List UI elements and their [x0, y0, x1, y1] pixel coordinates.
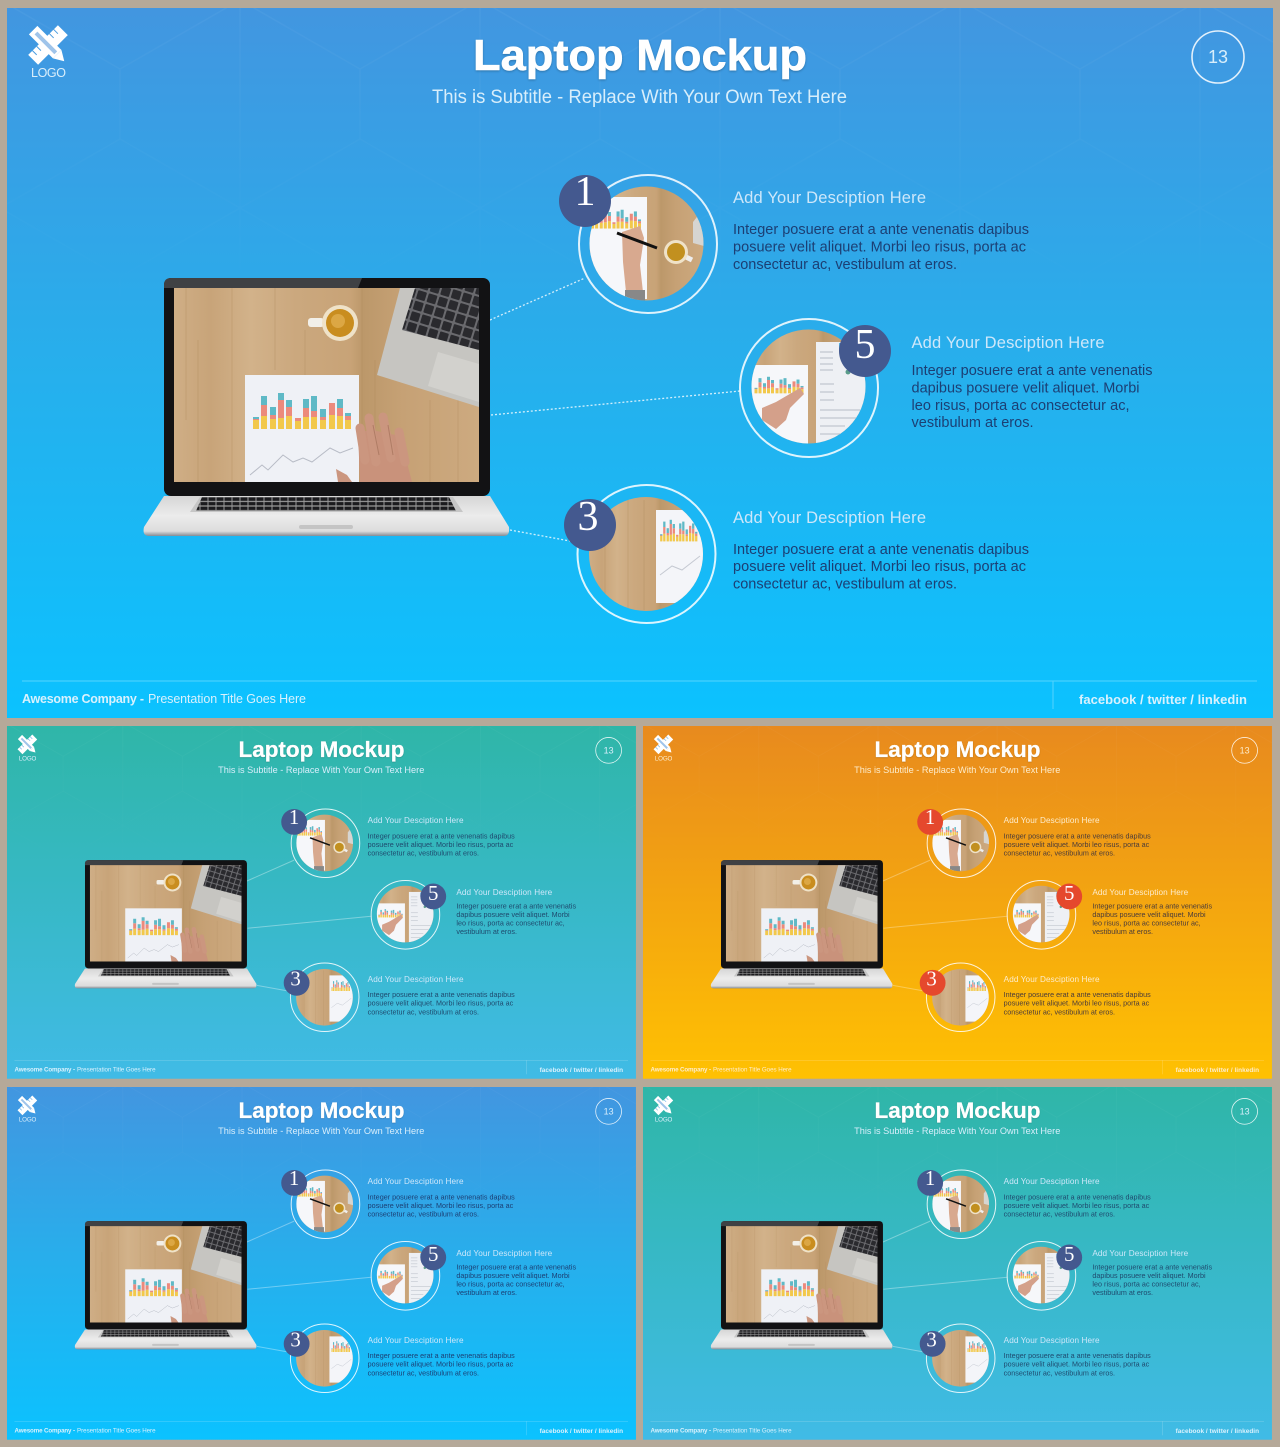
title: Laptop Mockup: [875, 737, 1040, 762]
slide background: [7, 8, 1273, 718]
description 1: consectetur ac, vestibulum at eros.: [368, 849, 479, 858]
background hexagon pattern: [7, 8, 1273, 348]
number badge 1: [559, 169, 611, 227]
logo label: LOGO: [31, 66, 66, 80]
slide background: [7, 1087, 636, 1440]
description 5: vestibulum at eros.: [912, 415, 1034, 431]
photo circle 5: [1007, 1242, 1076, 1310]
description 5: dapibus posuere velit aliquet. Morbi: [456, 910, 570, 919]
description 5: Integer posuere erat a ante venenatis: [456, 901, 576, 910]
footer company text: Awesome Company -: [650, 1066, 711, 1073]
number badge 3: 3: [926, 966, 937, 990]
icon: logo: [654, 735, 674, 755]
description 1: consectetur ac, vestibulum at eros.: [1004, 849, 1115, 858]
description 1: [733, 189, 1029, 273]
number badge 3: [284, 966, 310, 996]
footer company text: Presentation Title Goes Here: [713, 1066, 792, 1073]
description 5: leo risus, porta ac consectetur ac,: [912, 398, 1130, 414]
footer company text: [14, 1066, 156, 1073]
number badge 1: [917, 805, 943, 835]
description 5: leo risus, porta ac consectetur ac,: [456, 919, 565, 928]
description 3: posuere velit aliquet. Morbi leo risus, porta ac: [368, 1360, 514, 1369]
photo circle 3: [926, 963, 995, 1032]
logo label: LOGO: [655, 1116, 672, 1123]
description 1: consectetur ac, vestibulum at eros.: [368, 1210, 479, 1219]
description 1: Add Your Desciption Here: [1004, 816, 1100, 825]
laptop mockup: [75, 860, 256, 988]
footer company text: [650, 1427, 792, 1434]
description 3: consectetur ac, vestibulum at eros.: [368, 1007, 479, 1016]
description 5: Add Your Desciption Here: [456, 1249, 553, 1258]
icon: logo: [18, 735, 38, 755]
footer rules: [14, 1060, 628, 1074]
icon: logo: [18, 1096, 38, 1116]
number badge 5: 5: [1064, 881, 1074, 905]
description 5: Integer posuere erat a ante venenatis: [1092, 901, 1212, 910]
description 5: vestibulum at eros.: [456, 1288, 517, 1297]
icon: logo: [28, 25, 69, 66]
logo label: LOGO: [19, 1116, 36, 1123]
photo circle 3: [926, 1324, 995, 1393]
description 3: consectetur ac, vestibulum at eros.: [1004, 1368, 1115, 1377]
logo label: LOGO: [655, 755, 672, 762]
photo circle 3: [290, 963, 359, 1032]
description 1: posuere velit aliquet. Morbi leo risus, porta ac: [733, 240, 1026, 256]
number badge 5: [839, 322, 891, 377]
footer social links: facebook / twitter / linkedin: [540, 1428, 623, 1435]
footer company text: Awesome Company -: [14, 1066, 75, 1073]
number badge 5: 5: [854, 322, 876, 368]
connector lines: [247, 860, 371, 991]
description 5: Add Your Desciption Here: [1092, 888, 1189, 897]
number badge 5: [420, 1242, 446, 1270]
description 1: Integer posuere erat a ante venenatis dapibus: [368, 831, 515, 840]
description 3: Integer posuere erat a ante venenatis dapibus: [733, 542, 1029, 558]
description 1: posuere velit aliquet. Morbi leo risus, porta ac: [1004, 840, 1150, 849]
description 3: Add Your Desciption Here: [368, 975, 464, 984]
description 3: Integer posuere erat a ante venenatis dapibus: [368, 990, 515, 999]
description 1: [1004, 816, 1151, 858]
footer company text: Awesome Company -: [14, 1427, 75, 1434]
number badge 1: [917, 1166, 943, 1196]
description 1: Integer posuere erat a ante venenatis dapibus: [1004, 831, 1151, 840]
number badge 3: [284, 1327, 310, 1357]
small slide: blue: [7, 1087, 636, 1440]
number badge 1: [281, 1166, 307, 1196]
number badge 3: [920, 966, 946, 996]
title: Laptop Mockup: [239, 1098, 404, 1123]
description 3: Add Your Desciption Here: [1004, 975, 1100, 984]
page number badge: 13: [1208, 47, 1228, 67]
page number badge: [1192, 31, 1244, 83]
laptop mockup: [711, 1221, 892, 1349]
description 5: Integer posuere erat a ante venenatis: [456, 1262, 576, 1271]
logo label: LOGO: [19, 755, 36, 762]
description 3: [368, 1336, 515, 1377]
small slide: orange: [643, 726, 1272, 1079]
footer social links: facebook / twitter / linkedin: [1176, 1067, 1259, 1074]
footer rules: [14, 1421, 628, 1435]
description 5: [456, 1249, 576, 1297]
footer company text: [22, 692, 306, 706]
slide background: [643, 1087, 1272, 1440]
description 1: Integer posuere erat a ante venenatis dapibus: [1004, 1192, 1151, 1201]
icon: logo: [654, 1096, 674, 1116]
description 1: posuere velit aliquet. Morbi leo risus, porta ac: [1004, 1201, 1150, 1210]
description 1: Add Your Desciption Here: [368, 816, 464, 825]
photo circle 5: [1007, 881, 1076, 949]
photo circle 3: [578, 485, 716, 623]
description 5: leo risus, porta ac consectetur ac,: [1092, 919, 1201, 928]
footer rules: [22, 681, 1257, 709]
number badge 3: 3: [290, 966, 301, 990]
description 3: [1004, 1336, 1151, 1377]
small slide: teal: [7, 726, 636, 1079]
number badge 3: 3: [290, 1327, 301, 1351]
description 5: [1092, 888, 1212, 936]
footer social links: facebook / twitter / linkedin: [540, 1067, 623, 1074]
photo circle 1: [927, 1170, 996, 1239]
page number badge: [596, 1098, 622, 1124]
connector lines: [883, 860, 1007, 991]
photo circle 5: [371, 881, 440, 949]
title: Laptop Mockup: [875, 1098, 1040, 1123]
description 1: consectetur ac, vestibulum at eros.: [733, 257, 957, 273]
description 3: Integer posuere erat a ante venenatis dapibus: [1004, 990, 1151, 999]
photo circle 1: [927, 809, 996, 878]
background hexagon pattern: [7, 1087, 636, 1256]
number badge 1: 1: [925, 805, 935, 829]
description 5: dapibus posuere velit aliquet. Morbi: [456, 1271, 570, 1280]
connector lines: [490, 278, 740, 541]
photo circle 5: [371, 1242, 440, 1310]
description 3: Integer posuere erat a ante venenatis dapibus: [368, 1351, 515, 1360]
description 5: dapibus posuere velit aliquet. Morbi: [1092, 910, 1206, 919]
description 1: [368, 1177, 515, 1219]
footer company text: Awesome Company -: [650, 1427, 711, 1434]
description 5: [456, 888, 576, 936]
subtitle: This is Subtitle - Replace With Your Own Text Here: [218, 1125, 424, 1136]
photo circle 3: [290, 1324, 359, 1393]
description 3: [368, 975, 515, 1016]
description 1: Integer posuere erat a ante venenatis dapibus: [368, 1192, 515, 1201]
photo circle 1: [291, 1170, 360, 1239]
description 1: posuere velit aliquet. Morbi leo risus, porta ac: [368, 1201, 514, 1210]
description 5: Integer posuere erat a ante venenatis: [912, 363, 1152, 379]
description 5: Add Your Desciption Here: [1092, 1249, 1189, 1258]
description 3: [733, 509, 1029, 592]
description 3: Add Your Desciption Here: [1004, 1336, 1100, 1345]
connector lines: [883, 1221, 1007, 1352]
page number badge: 13: [1240, 745, 1250, 755]
title: Laptop Mockup: [239, 737, 404, 762]
small slide: teal variant: [643, 1087, 1272, 1440]
number badge 1: [281, 805, 307, 835]
title: Laptop Mockup: [473, 31, 807, 80]
description 5: dapibus posuere velit aliquet. Morbi: [912, 380, 1140, 396]
subtitle: This is Subtitle - Replace With Your Own Text Here: [854, 1125, 1060, 1136]
photo circle 1: [291, 809, 360, 878]
laptop mockup: [711, 860, 892, 988]
description 5: Integer posuere erat a ante venenatis: [1092, 1262, 1212, 1271]
description 1: Add Your Desciption Here: [368, 1177, 464, 1186]
number badge 5: 5: [1064, 1242, 1074, 1266]
footer company text: [14, 1427, 156, 1434]
number badge 3: 3: [926, 1327, 937, 1351]
description 1: Integer posuere erat a ante venenatis dapibus: [733, 222, 1029, 238]
number badge 3: 3: [578, 494, 598, 540]
description 1: [368, 816, 515, 858]
number badge 5: [420, 881, 446, 909]
description 1: [1004, 1177, 1151, 1219]
description 5: vestibulum at eros.: [1092, 927, 1153, 936]
number badge 5: 5: [428, 1242, 438, 1266]
description 1: consectetur ac, vestibulum at eros.: [1004, 1210, 1115, 1219]
description 3: posuere velit aliquet. Morbi leo risus, porta ac: [1004, 999, 1150, 1008]
description 5: vestibulum at eros.: [456, 927, 517, 936]
page number badge: [596, 737, 622, 763]
description 5: leo risus, porta ac consectetur ac,: [1092, 1280, 1201, 1289]
footer company text: Presentation Title Goes Here: [77, 1066, 156, 1073]
footer company text: Presentation Title Goes Here: [77, 1427, 156, 1434]
description 3: consectetur ac, vestibulum at eros.: [733, 576, 957, 592]
number badge 5: 5: [428, 881, 438, 905]
number badge 1: 1: [289, 1166, 299, 1190]
number badge 3: [564, 494, 616, 551]
page number badge: 13: [604, 745, 614, 755]
description 3: posuere velit aliquet. Morbi leo risus, porta ac: [368, 999, 514, 1008]
footer company text: [650, 1066, 792, 1073]
number badge 1: 1: [289, 805, 299, 829]
page number badge: [1232, 1098, 1258, 1124]
description 5: leo risus, porta ac consectetur ac,: [456, 1280, 565, 1289]
footer rules: [650, 1060, 1264, 1074]
description 5: vestibulum at eros.: [1092, 1288, 1153, 1297]
footer company text: Awesome Company -: [22, 692, 144, 706]
slide background: [7, 726, 636, 1079]
description 3: Integer posuere erat a ante venenatis dapibus: [1004, 1351, 1151, 1360]
description 3: consectetur ac, vestibulum at eros.: [368, 1368, 479, 1377]
description 3: consectetur ac, vestibulum at eros.: [1004, 1007, 1115, 1016]
main slide: blue: [7, 8, 1273, 718]
page number badge: [1232, 737, 1258, 763]
background hexagon pattern: [643, 726, 1272, 895]
footer company text: Presentation Title Goes Here: [148, 692, 306, 706]
background hexagon pattern: [643, 1087, 1272, 1256]
slide background: [643, 726, 1272, 1079]
description 1: posuere velit aliquet. Morbi leo risus, porta ac: [368, 840, 514, 849]
number badge 5: [1056, 881, 1082, 909]
subtitle: This is Subtitle - Replace With Your Own Text Here: [218, 764, 424, 775]
number badge 5: [1056, 1242, 1082, 1270]
description 3: Add Your Desciption Here: [733, 509, 926, 527]
background hexagon pattern: [7, 726, 636, 895]
page number badge: 13: [604, 1106, 614, 1116]
description 5: Add Your Desciption Here: [912, 334, 1104, 352]
footer social links: facebook / twitter / linkedin: [1079, 692, 1247, 707]
footer social links: facebook / twitter / linkedin: [1176, 1428, 1259, 1435]
description 5: dapibus posuere velit aliquet. Morbi: [1092, 1271, 1206, 1280]
description 5: [1092, 1249, 1212, 1297]
number badge 1: 1: [925, 1166, 935, 1190]
description 5: [912, 334, 1152, 431]
photo circle 1: [579, 175, 717, 313]
subtitle: This is Subtitle - Replace With Your Own Text Here: [432, 87, 847, 108]
description 3: [1004, 975, 1151, 1016]
number badge 1: 1: [574, 169, 596, 215]
footer rules: [650, 1421, 1264, 1435]
connector lines: [247, 1221, 371, 1352]
footer company text: Presentation Title Goes Here: [713, 1427, 792, 1434]
description 5: Add Your Desciption Here: [456, 888, 553, 897]
laptop mockup: [144, 278, 509, 536]
page number badge: 13: [1240, 1106, 1250, 1116]
description 3: posuere velit aliquet. Morbi leo risus, porta ac: [733, 559, 1026, 575]
description 3: posuere velit aliquet. Morbi leo risus, porta ac: [1004, 1360, 1150, 1369]
laptop mockup: [75, 1221, 256, 1349]
description 3: Add Your Desciption Here: [368, 1336, 464, 1345]
subtitle: This is Subtitle - Replace With Your Own Text Here: [854, 764, 1060, 775]
description 1: Add Your Desciption Here: [1004, 1177, 1100, 1186]
description 1: Add Your Desciption Here: [733, 189, 926, 207]
photo circle 5: [740, 319, 878, 457]
number badge 3: [920, 1327, 946, 1357]
